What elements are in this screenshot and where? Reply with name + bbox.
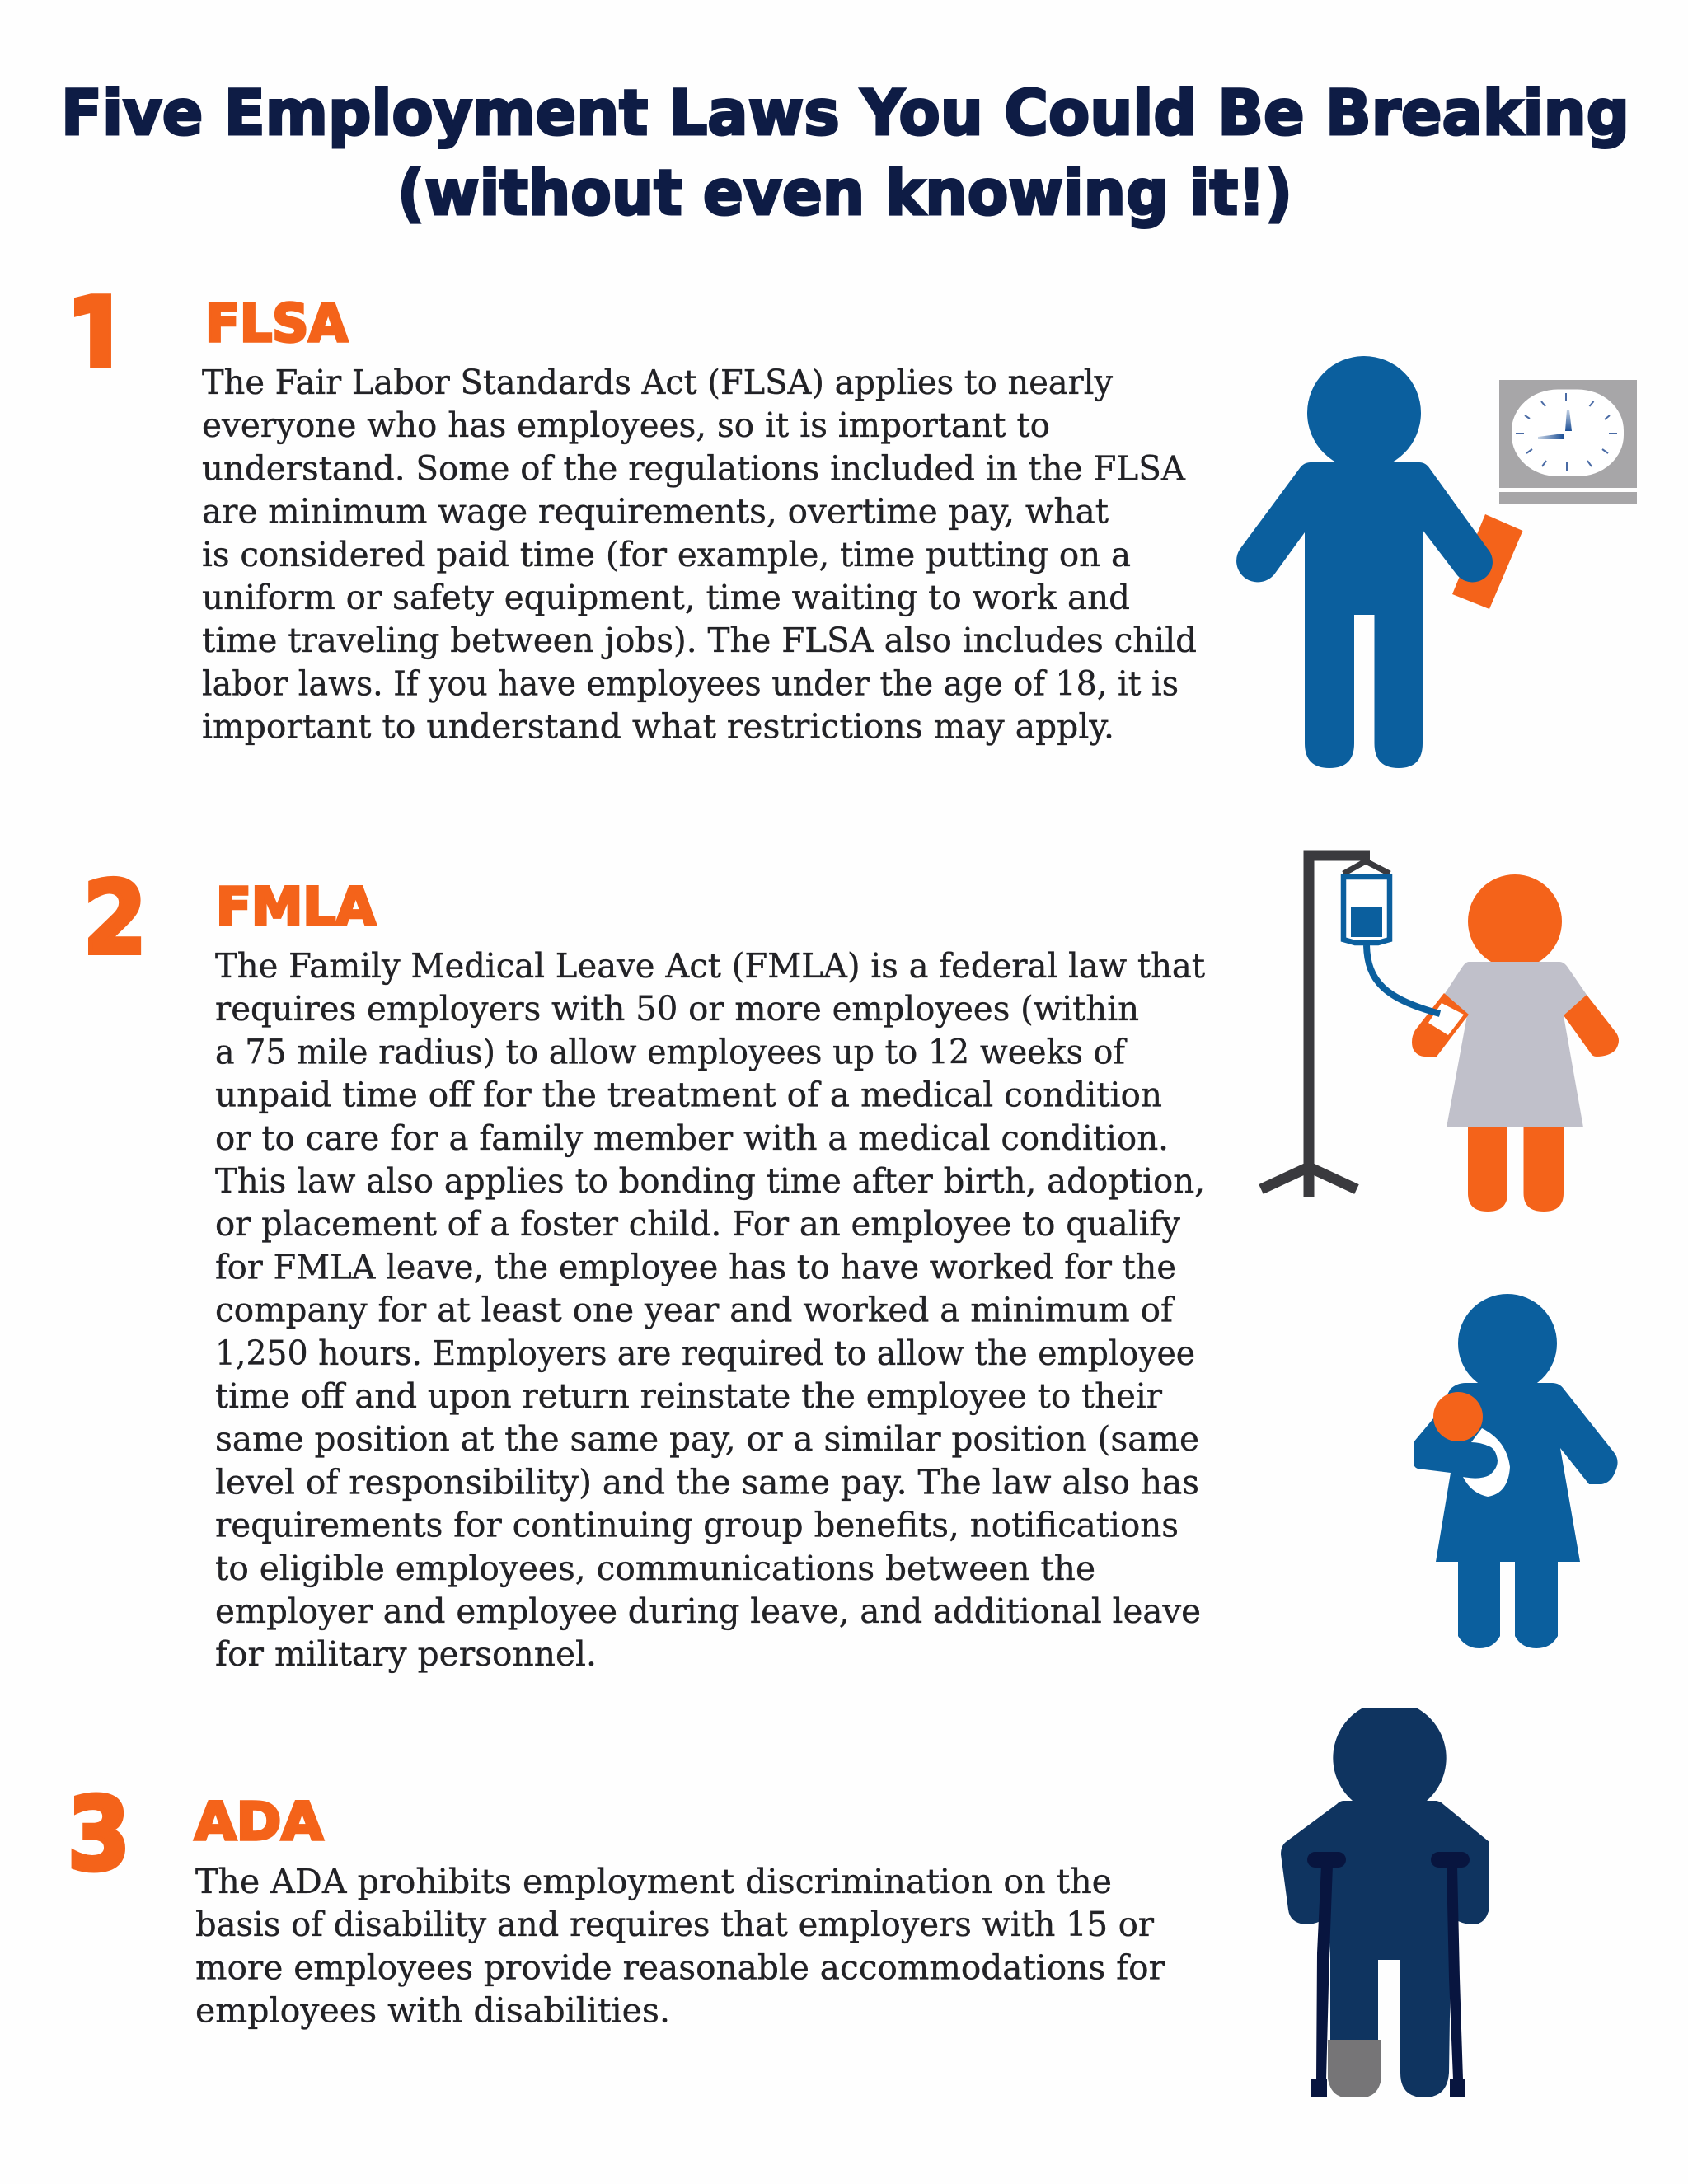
cast	[1328, 2040, 1381, 2097]
text block: FMLA description: or placement of a foster child. For an employee to qualify	[215, 1204, 1181, 1244]
text block: FLSA description: The Fair Labor Standards Act (FLSA) applies to nearly	[202, 363, 1114, 402]
text block: ADA description: basis of disability and requires that employers with 15 or	[195, 1905, 1154, 1944]
title	[61, 76, 1629, 229]
text block: FMLA description: for FMLA leave, the employee has to have worked for the	[215, 1247, 1176, 1286]
time card	[1452, 514, 1523, 609]
section 3: ADA	[68, 1777, 1165, 2031]
section 1: FLSA	[62, 270, 1197, 747]
text block: FMLA description: same position at the same pay, or a similar position (same	[215, 1419, 1199, 1459]
text block: FMLA description: to eligible employees, communications between the	[215, 1549, 1095, 1588]
text block: ADA description	[195, 1862, 1165, 2031]
title: Five Employment Laws You Could Be Breaking	[61, 76, 1629, 149]
text block: FMLA description: The Family Medical Leave Act (FMLA) is a federal law that	[215, 946, 1205, 986]
person	[1281, 1708, 1489, 2097]
text block: FMLA description: unpaid time off for the treatment of a medical condition	[215, 1076, 1162, 1115]
icon: worker with time card and clock	[1236, 356, 1637, 768]
baby head	[1433, 1392, 1483, 1441]
icon: patient with IV stand	[1261, 855, 1619, 1212]
text block: ADA description: The ADA prohibits employment discrimination on the	[195, 1862, 1112, 1901]
text block: FLSA description: everyone who has employees, so it is important to	[202, 405, 1050, 445]
icon: person on crutches	[1281, 1708, 1489, 2097]
text block: FLSA description: understand. Some of the regulations included in the FLSA	[202, 448, 1186, 488]
text block: ADA description: more employees provide reasonable accommodations for	[195, 1947, 1165, 1987]
text block: FMLA description	[215, 946, 1205, 1674]
patient	[1412, 874, 1619, 1212]
section 2: FMLA	[83, 860, 1205, 1674]
text block: FMLA description: requires employers with 50 or more employees (within	[215, 989, 1139, 1029]
text block: FLSA description: time traveling between jobs). The FLSA also includes child	[202, 621, 1197, 660]
text block: FMLA description: level of responsibility) and the same pay. The law also has	[215, 1462, 1199, 1502]
IV bag	[1343, 877, 1440, 1014]
heading: ADA: ADA	[195, 1792, 323, 1852]
heading: FLSA: FLSA	[205, 293, 348, 354]
text block: FLSA description: uniform or safety equipment, time waiting to work and	[202, 578, 1130, 617]
crutches	[1307, 1852, 1470, 2097]
text block: FMLA description: 1,250 hours. Employers are required to allow the employee	[215, 1333, 1195, 1373]
baby blanket	[1463, 1428, 1510, 1497]
text block: FMLA description: requirements for continuing group benefits, notifications	[215, 1506, 1179, 1545]
text block: FMLA description: for military personnel.	[215, 1634, 597, 1674]
text block: FLSA description	[202, 363, 1197, 747]
text block: FMLA description: time off and upon return reinstate the employee to their	[215, 1376, 1162, 1416]
number 3: 3	[68, 1777, 130, 1893]
text block: FLSA description: are minimum wage requirements, overtime pay, what	[202, 492, 1109, 532]
heading: FMLA: FMLA	[216, 877, 376, 937]
text block: FLSA description: is considered paid time (for example, time putting on a	[202, 535, 1131, 574]
person	[1236, 356, 1493, 768]
text block: FMLA description: This law also applies to bonding time after birth, adoption,	[215, 1161, 1205, 1201]
IV pole	[1261, 855, 1390, 1197]
text block: FMLA description: employer and employee during leave, and additional leave	[215, 1591, 1201, 1631]
text block: FLSA description: important to understand what restrictions may apply.	[202, 707, 1114, 747]
title: (without even knowing it!)	[397, 156, 1292, 229]
number 2: 2	[83, 860, 147, 977]
text block: FMLA description: or to care for a family member with a medical condition.	[215, 1118, 1169, 1158]
text block: FLSA description: labor laws. If you have employees under the age of 18, it is	[202, 663, 1179, 703]
clock	[1499, 380, 1637, 504]
text block: FMLA description: company for at least one year and worked a minimum of	[215, 1291, 1175, 1330]
number 1: 1	[62, 270, 134, 416]
text block: FMLA description: a 75 mile radius) to allow employees up to 12 weeks of	[215, 1032, 1128, 1071]
icon: mother holding baby	[1414, 1294, 1618, 1648]
text block: ADA description: employees with disabilities.	[195, 1991, 670, 2031]
